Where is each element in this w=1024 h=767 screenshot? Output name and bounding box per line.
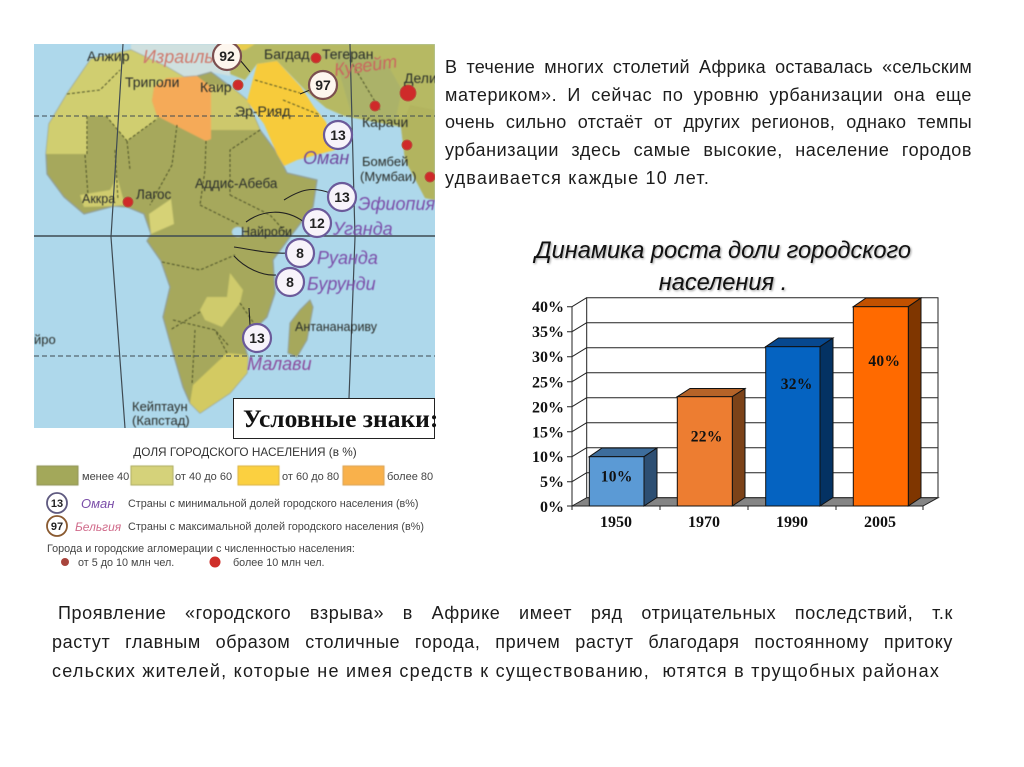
city labels: Аккра [82,192,115,206]
legend swatch labels [82,471,433,483]
country labels: Кувейт [333,51,398,80]
legend city markers: Города и городские агломерации с численностью населения: [47,543,355,555]
percentage circles [213,42,356,352]
y axis labels: 25% [532,374,564,392]
bottom paragraph: растут главным образом столичные города, причем растут благодаря постоянному притоку [52,632,953,652]
legend maximum marker: 97 [51,521,63,533]
arrows to countries [234,60,330,325]
x axis labels: 1950 [600,514,632,531]
chart title: Динамика роста доли городского [535,238,911,264]
intro paragraph: урбанизации здесь самые высокие, население городов [445,140,972,160]
bar 1950 [589,448,657,506]
intro paragraph: очень сильно отстаёт от других регионов, однако темпы [445,112,972,132]
y axis labels: 30% [532,349,564,366]
city labels: Найроби [241,225,292,239]
x axis labels: 2005 [864,514,896,531]
sea background [34,44,435,428]
bottom paragraph: Проявление «городского взрыва» в Африке имеет ряд отрицательных последствий, т.к [58,603,953,623]
city labels [34,46,437,428]
legend swatch labels: от 60 до 80 [282,471,339,483]
meridians and parallels [34,44,435,428]
city labels: Триполи [125,74,179,90]
country labels: Бурунди [307,274,376,294]
country labels: Руанда [317,248,378,268]
bar 2005 [853,298,921,506]
y axis labels: 35% [532,324,564,341]
y axis labels: 20% [532,400,564,416]
percentage circles: 13 [330,127,346,143]
countries 40 to 60 percent [46,50,184,154]
bar 1970 [677,388,745,506]
percentage circles: 12 [309,215,325,231]
city labels: Алжир [87,48,130,64]
bottom paragraph: сельских жителей, которые не имея средств к существованию, ютятся в трущобных районах [52,661,940,681]
percentage circles: 92 [219,48,235,64]
city dots [123,53,435,207]
intro paragraph: материком». И сейчас по уровню урбанизации она еще [445,85,972,105]
y axis labels [532,299,564,516]
legend minimum marker: 13 [51,498,63,510]
Madagascar island [288,300,313,357]
bar value labels: 22% [691,428,723,446]
bottom paragraph [52,603,953,681]
map of Africa [34,44,435,428]
legend swatch labels: от 40 до 60 [175,471,232,483]
intro paragraph [445,57,972,188]
x axis labels: 1970 [688,514,720,531]
country labels: Оман [303,148,349,168]
y axis labels: 40% [532,299,564,316]
city labels: йро [34,332,56,347]
chart walls and grid [567,298,938,506]
Africa continent [46,50,317,413]
city labels: Карачи [362,114,408,130]
y axis labels: 5% [540,474,564,491]
city labels: Дели [404,70,437,86]
legend maximum marker [47,516,424,536]
y axis labels: 15% [532,424,564,442]
chart title [532,238,912,296]
chart title: населения . [659,270,787,296]
legend maximum marker: Бельгия [75,520,122,534]
country labels [143,47,435,374]
city labels: Каир [200,79,232,95]
percentage circles: 97 [315,77,331,93]
lake [232,227,244,237]
legend city markers: от 5 до 10 млн чел. [78,557,174,569]
legend title box: Условные знаки: [243,404,438,433]
legend swatch labels: более 80 [387,471,433,483]
city labels: Тегеран [322,46,373,62]
city labels: Антананариву [295,320,378,334]
chart floor [572,498,938,506]
legend swatch labels: менее 40 [82,471,129,483]
legend heading: ДОЛЯ ГОРОДСКОГО НАСЕЛЕНИЯ (в %) [133,445,357,459]
percentage circles: 13 [249,330,265,346]
x axis labels [600,514,896,531]
Arabian peninsula [247,61,335,166]
legend title box [233,398,435,439]
intro paragraph: удваивается каждые 10 лет. [445,168,710,188]
land masses [46,44,435,413]
country labels: Израиль [143,47,214,67]
country labels: Уганда [332,219,393,239]
bar value labels: 10% [601,468,633,486]
percentage circles: 8 [296,245,304,261]
city labels: Лагос [136,187,172,202]
country labels: Малави [247,354,312,374]
legend maximum marker: Страны с максимальной долей городского населения (в%) [128,521,424,533]
legend colour swatches [37,466,384,485]
x axis labels: 1990 [776,514,808,531]
bar 1990 [766,338,833,506]
city labels: Кейптаун [132,399,188,414]
city labels: (Мумбаи) [360,169,416,184]
bar value labels: 40% [868,353,900,370]
country labels: Эфиопия [358,194,435,214]
city labels: Багдад [264,46,310,62]
borders [67,60,380,385]
bar value labels [601,353,900,486]
percentage circles: 8 [286,274,294,290]
country over 80 percent: Libya [152,76,211,141]
city labels: Аддис-Абеба [195,176,278,191]
city labels: Бомбей [362,154,408,169]
legend minimum marker [47,493,418,513]
mediterranean water haze [131,44,230,77]
legend minimum marker: Страны с минимальной долей городского населения (в%) [128,498,418,510]
percentage circles: 13 [334,189,350,205]
legend city markers [47,543,355,569]
y axis labels: 0% [540,499,564,516]
city labels: Эр-Рияд [235,103,290,119]
y axis labels: 10% [532,449,564,466]
city labels: (Капстад) [132,413,190,428]
legend city markers: более 10 млн чел. [233,557,325,569]
bar value labels: 32% [781,376,813,393]
intro paragraph: В течение многих столетий Африка оставалась «сельским [445,57,972,77]
legend minimum marker: Оман [81,496,114,511]
Asia land [229,44,435,128]
